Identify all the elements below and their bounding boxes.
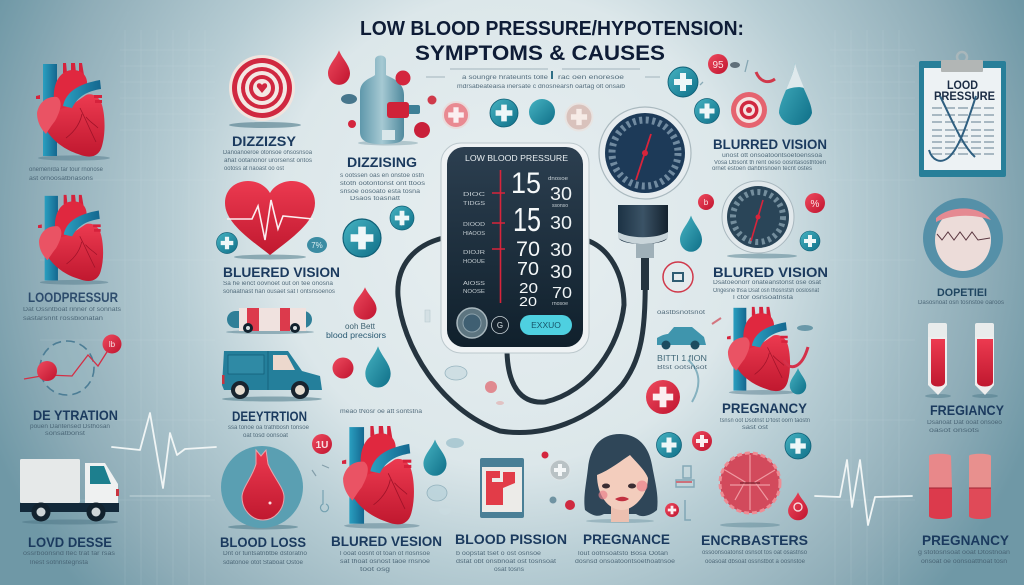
description: lnest sotnnstegnsta <box>30 560 89 566</box>
description <box>223 281 335 295</box>
heading: PREGNANCE <box>583 531 670 547</box>
description: ossoonsoatonst osnsot tos oat osastnso <box>702 550 808 556</box>
icon: red swirl drop <box>788 492 808 520</box>
description: osat tosns <box>494 567 524 573</box>
description <box>340 173 425 202</box>
icon: red percent badge <box>805 193 825 213</box>
main readings: 15 <box>511 167 541 200</box>
subtitle text <box>426 69 660 90</box>
secondary readings: 70 <box>552 285 572 302</box>
title: LOW BLOOD PRESSURE/HYPOTENSION: <box>360 18 744 40</box>
icon: inhaler bottle <box>358 56 420 146</box>
clipboard lines <box>932 108 995 154</box>
icon: large teal drop <box>779 63 812 125</box>
clipboard heading: LOOD <box>947 78 978 92</box>
pressure gauge <box>599 107 691 290</box>
note text: BITTI 1 fION <box>657 354 707 363</box>
icon: heart with ECG <box>225 181 315 260</box>
monitor small labels: rnosoe <box>552 301 568 307</box>
panel: test tubes <box>925 323 1005 434</box>
panel: low blood pressure note <box>326 287 423 415</box>
description <box>720 418 810 431</box>
title: SYMPTOMS & CAUSES <box>415 42 665 65</box>
panel: dehydration left <box>24 334 122 437</box>
red scale <box>492 170 505 303</box>
icon: red dot <box>542 452 548 458</box>
icon: red capsule <box>929 454 952 519</box>
description: ootoss at naoast oo ost <box>224 166 284 172</box>
description: ossrboonsnd ltec trat far rsas <box>23 551 115 557</box>
description: Dsaos toasnatt <box>350 196 400 202</box>
panel: dizzising bottle <box>328 50 436 257</box>
description: l ctor osnsoatnsta <box>733 295 794 301</box>
icon: red plus badge <box>692 431 712 451</box>
note text: Btst ootsnsot <box>657 365 707 371</box>
monitor small labels: DIOC <box>463 192 486 198</box>
monitor small labels: TIDGS <box>463 201 486 207</box>
icon: red half blob <box>332 358 354 378</box>
description: stoth ootontonst ont ttoos <box>340 181 425 187</box>
description: sat thoat osnost taoe rnsnoe <box>340 559 431 565</box>
heading: DIZZIZSY <box>232 133 297 149</box>
icon: teal circle with pale ball <box>923 198 1003 278</box>
description <box>456 551 556 573</box>
panel: bottom center heart <box>331 426 447 573</box>
heart description: onemenrda tar tour rnonose <box>29 167 104 173</box>
panel: pills <box>918 454 1010 565</box>
description: Dat Ossntboat rinner of sonnats <box>23 307 121 313</box>
monitor small button <box>492 316 508 334</box>
description <box>702 550 808 565</box>
panel: encrbasters <box>701 433 811 565</box>
icon: tablet with red shapes <box>480 458 524 518</box>
icon: anatomical heart <box>36 63 110 161</box>
icon: small plus badge <box>390 206 414 230</box>
icon: teal van <box>222 351 322 402</box>
icon: plus badge <box>668 67 698 97</box>
clipboard heading <box>934 78 995 103</box>
description: onsoat oe oonsoatthoat tosn <box>921 559 1007 565</box>
clipboard paper <box>924 68 1001 170</box>
description: ornet estoen dahbnsnoen tecnt ostes <box>712 166 812 172</box>
icon: spiral target <box>229 55 301 128</box>
main readings: 15 <box>513 201 541 238</box>
description: oat tosd oonsoat <box>243 433 288 439</box>
description: dosnsd onsoatoontsoethoatnsoe <box>575 559 676 565</box>
icon: red ring <box>663 262 693 292</box>
description: Dsanoat Dat ooat onsoeo <box>927 420 1003 426</box>
description <box>918 550 1010 565</box>
icon: plus badge <box>216 232 238 254</box>
small caption: meao tNosr oe att sontstna <box>340 409 423 415</box>
scattered fragments <box>312 60 813 520</box>
description <box>340 551 431 573</box>
panel: teal ball and pregnancy heart <box>720 307 810 431</box>
main readings <box>511 167 541 309</box>
panel: truck <box>20 459 119 566</box>
description: pouen Dantensed Dsthosan <box>30 424 110 430</box>
icon: decorative red arc <box>756 72 775 82</box>
description: sastarsnnt rossbionatan <box>23 316 103 322</box>
small caption: oastbsnotsnot <box>657 310 705 316</box>
description: b oopstat tset o ost osnsoe <box>456 551 542 557</box>
icon: dial gauge <box>722 181 797 258</box>
description <box>927 420 1003 434</box>
monitor dial <box>457 308 487 338</box>
panel: dopetiei <box>918 198 1004 306</box>
note text <box>326 322 386 340</box>
description: sonaatnast han ousaet sat l ontsnsoenos <box>223 289 335 295</box>
description: ahat ootanonor urorsenst ontos <box>224 158 312 164</box>
monitor action button <box>520 315 572 335</box>
icon: pale red plus <box>443 102 469 128</box>
icon: blood tube <box>925 323 951 398</box>
monitor title: LOW BLOOD PRESSURE <box>465 153 568 163</box>
icon: red badge <box>698 194 714 210</box>
icon: large plus badge <box>343 219 381 257</box>
description: Vosa Dbsont th rent oeso oosntasosthtoen <box>714 160 826 166</box>
description: sast ost <box>742 425 768 431</box>
description: Danoanoeroe otonsoe ohsosnsoa <box>223 150 313 156</box>
ECG line left <box>112 413 216 496</box>
panel: dizziness target <box>223 55 313 172</box>
icon: red plus small <box>665 503 679 517</box>
description: Dasosnoat osn tosnstoe oaroos <box>918 300 1004 306</box>
subtitle text: a soungre hrateunts tolle <box>462 75 549 81</box>
icon: small blue blob <box>341 94 357 104</box>
heart description <box>29 167 104 182</box>
icon: anatomical heart <box>727 307 795 395</box>
heading: BLURED VESION <box>331 533 442 549</box>
icon: beige plus <box>566 104 592 130</box>
description: sonsatbonst <box>45 431 85 437</box>
main readings: 70 <box>516 238 540 261</box>
plus badges row <box>443 99 592 130</box>
description <box>228 425 310 439</box>
icon: small target <box>731 92 767 128</box>
icon: red badge: 1U <box>316 440 328 451</box>
icon: red badge: b <box>704 198 709 207</box>
description: Dnt or tuntsatnbtbe dstoratno <box>223 551 308 557</box>
icon: red drop <box>353 287 377 320</box>
icon: woman face <box>584 434 658 523</box>
icon: teal plus <box>490 99 518 127</box>
description: Dsatoeonorr onateanstonst ose osat <box>713 280 821 286</box>
icon: plus badge <box>800 231 820 251</box>
icon: red percent badge: % <box>811 199 820 210</box>
description <box>23 551 115 566</box>
monitor small labels: DIOOD <box>463 222 486 228</box>
icon: capsule car <box>226 308 314 334</box>
heading: LOODPRESSUR <box>28 289 118 305</box>
description <box>223 150 313 172</box>
heading: BLURRED VISION <box>713 136 827 152</box>
monitor small labels: NOOSE <box>463 289 486 295</box>
description <box>713 280 821 301</box>
blood pressure cuff tube <box>398 238 645 432</box>
description: tsnsn oot Dsotnst D'tost oorn taostn <box>720 418 810 424</box>
description: toot osg <box>360 567 390 573</box>
panel: blurred vision heart <box>216 181 340 295</box>
icon: small teal badge: 7% <box>311 241 323 250</box>
icon: gray plus <box>550 460 570 480</box>
icon: white truck <box>20 459 119 524</box>
icon: blood drop in circle <box>221 446 303 530</box>
icon: red vessel tail <box>784 347 808 367</box>
heading: DOPETIEI <box>937 287 987 299</box>
heading: DE YTRATION <box>33 407 118 423</box>
monitor small labels: HOOUE <box>463 259 486 265</box>
heading: DEEYTRTION <box>232 408 307 424</box>
secondary readings <box>550 184 572 302</box>
description: l ooat oosnt ot toan ot rlosnsoe <box>340 551 431 557</box>
icon: plus badge <box>785 433 811 459</box>
icon: pulse circle: lb <box>109 340 116 349</box>
icon: teal drop <box>680 216 702 252</box>
description: ooasoat dbsoat ossnstbot a oosnstoe <box>705 559 806 565</box>
description <box>30 424 110 437</box>
icon: red number badge <box>708 54 728 74</box>
panel: loodpressur <box>23 195 121 322</box>
secondary readings: 30 <box>550 262 572 282</box>
icon: anatomical heart <box>342 426 420 529</box>
description <box>223 551 308 566</box>
icon: teal ball <box>529 99 555 125</box>
description: Sa he ienct oovnoet out on tee onosna <box>223 281 334 287</box>
icon: red badge <box>565 500 575 510</box>
icon: anatomical heart <box>38 195 108 285</box>
secondary readings: 30 <box>550 184 572 204</box>
panel: second gauge symptoms <box>663 181 828 301</box>
icon: red capsule <box>969 454 991 519</box>
description: oasot onsots <box>929 428 979 434</box>
icon: red plus blob <box>396 70 410 86</box>
clipboard clip <box>941 52 983 72</box>
panel: clipboard <box>919 52 1006 177</box>
monitor small labels: AIOSS <box>463 281 486 287</box>
monitor device <box>441 143 589 353</box>
monitor small labels <box>463 176 568 307</box>
subtitle text: rac oen enoresoe <box>558 75 625 81</box>
description: ssa tonoe oa trathbosh tonsoe <box>228 425 310 431</box>
icon: small red blob <box>428 96 436 104</box>
title <box>360 18 744 65</box>
panel: top right symptoms <box>668 54 827 172</box>
clipboard board <box>919 61 1006 177</box>
description <box>712 153 826 172</box>
note text: ooh Bett <box>345 322 376 331</box>
description: Ongesne thsa Dsat osn thosnstsh ooslosnat <box>713 288 819 294</box>
heading: DIZZISING <box>347 154 417 170</box>
description: lout ootnsoatsto Bosa Ootan <box>578 551 668 557</box>
monitor small button: G <box>497 321 503 330</box>
monitor small labels: DIOJR <box>463 250 486 256</box>
icon: tissue sphere <box>720 453 780 528</box>
heading: BLUERED VISION <box>223 264 340 280</box>
panel: blood pission <box>455 452 575 573</box>
secondary readings: 30 <box>550 240 572 260</box>
panel: vehicles and dehydration <box>222 308 322 439</box>
icon: red blob <box>414 122 430 138</box>
clipboard heading: PRESSURE <box>934 89 995 103</box>
secondary readings: 30 <box>550 213 572 233</box>
monitor small labels: ssonso <box>552 203 568 209</box>
heading: PREGNANCY <box>922 532 1010 548</box>
heading: LOVD DESSE <box>28 534 112 550</box>
heading: BLURED VISION <box>713 264 828 280</box>
icon: plus badge <box>694 98 720 124</box>
monitor small labels: HIAOOS <box>463 231 486 237</box>
icon: teal drop <box>423 440 447 476</box>
subtitle text: mdrsabeateaisa inersate c dnosnearsh oartag olt onsaib <box>457 84 626 90</box>
icon: teal drop <box>365 346 391 388</box>
description <box>23 307 121 322</box>
main readings: 20 <box>519 294 537 309</box>
main readings: 20 <box>519 280 538 297</box>
icon: red plus badge <box>646 380 680 414</box>
heading: PREGNANCY <box>722 400 808 416</box>
panel: small car notes <box>646 310 712 458</box>
heading: ENCRBASTERS <box>701 532 808 548</box>
heading: BLOOD LOSS <box>220 534 306 550</box>
icon: teal plus badge <box>656 432 682 458</box>
heart description: ast ornoosatbnasons <box>29 176 93 182</box>
description: snsoe oosoato esta tosna <box>340 189 421 195</box>
heading: FREGIANCY <box>930 402 1005 418</box>
heading: BLOOD PISSION <box>455 531 567 547</box>
description: g stotosnsoat ooat Dtostnoan <box>918 550 1010 556</box>
ECG line right <box>815 460 912 525</box>
icon: small teal car <box>657 327 706 350</box>
note text: blood precsiors <box>326 331 386 340</box>
icon: small teal drop <box>790 368 806 394</box>
icon: blood tube <box>972 323 998 398</box>
crossed tube <box>929 96 976 161</box>
panel: blood loss <box>220 434 332 566</box>
icon: small red dot <box>348 120 356 128</box>
description: s ootssen oas en onstoe ostn <box>340 173 424 179</box>
monitor action button: EXXUO <box>531 320 561 330</box>
note text <box>657 354 707 371</box>
description: unost ott onsoatoontsoetoenssoa <box>722 153 823 159</box>
icon: red drop <box>328 50 350 85</box>
main readings: 70 <box>517 259 539 279</box>
description: sdatonoe otot Staboat Ostoe <box>223 560 304 566</box>
description <box>575 551 676 565</box>
monitor small labels: dnosoe <box>548 176 568 182</box>
icon: red number badge: 95 <box>712 60 724 71</box>
panel: pregnance portrait <box>575 434 679 565</box>
description: dstat obt onsbnoat ost tosnsoat <box>456 559 556 565</box>
panel: heart top left <box>29 63 110 182</box>
